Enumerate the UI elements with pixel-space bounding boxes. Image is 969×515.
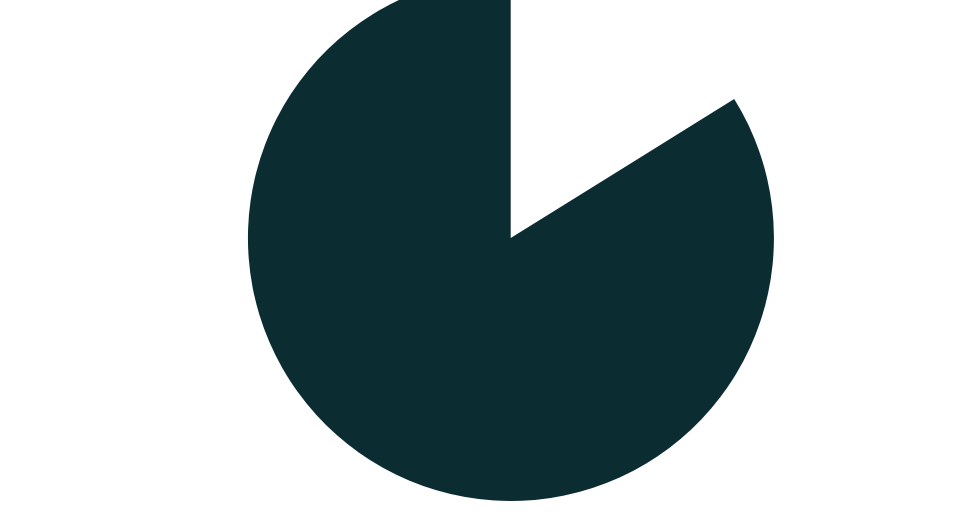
pie slice: main dark segment	[248, 0, 774, 501]
